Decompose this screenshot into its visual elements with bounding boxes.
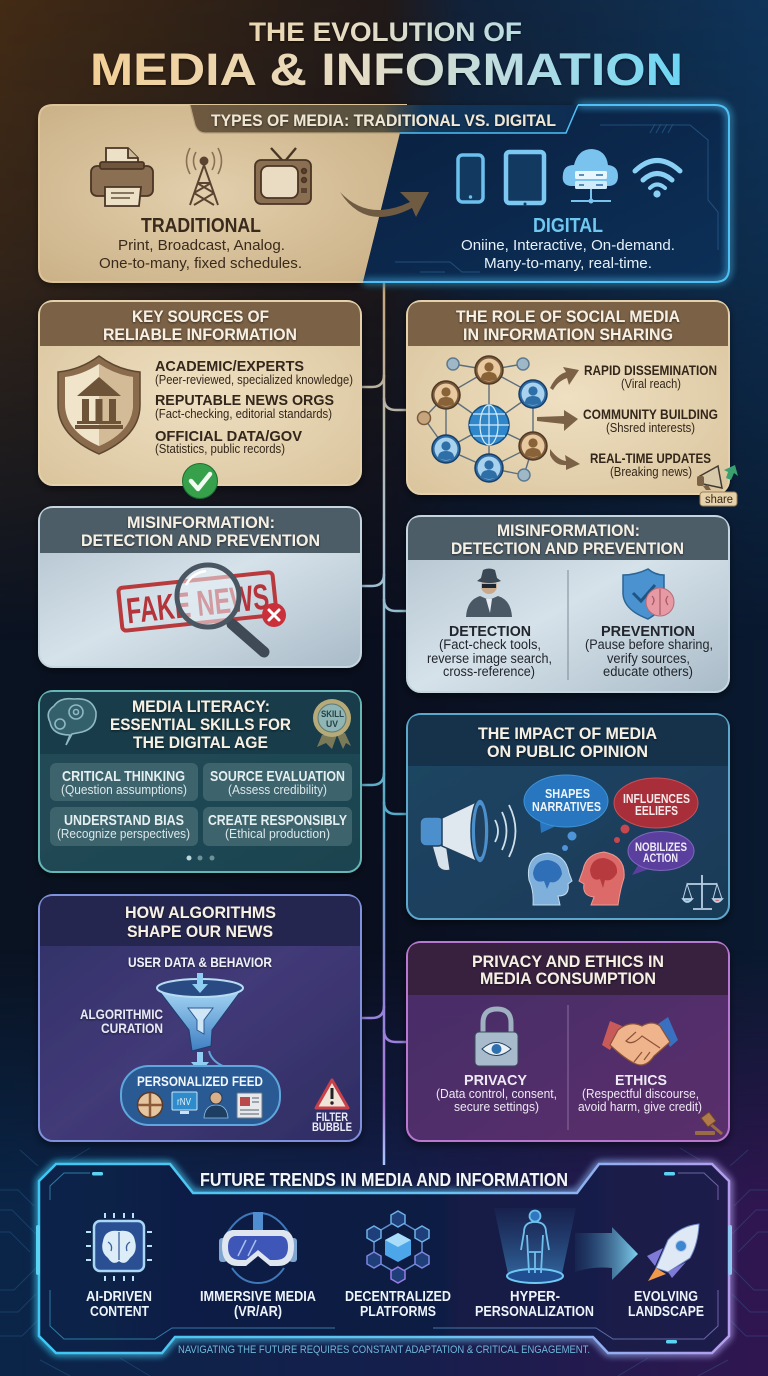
- prevention text: (Pause before sharing,: [585, 637, 713, 652]
- bubble: influences beliefs: [614, 778, 698, 843]
- digital text: [461, 215, 675, 272]
- header: THE IMPACT OF MEDIA: [478, 724, 657, 743]
- bubble: mobilizes action: [628, 832, 694, 875]
- header: ON PUBLIC OPINION: [487, 742, 648, 761]
- trend labels: EVOLVING: [634, 1289, 698, 1305]
- icon: share megaphone: share: [705, 494, 733, 506]
- skill card: create responsibly: [203, 807, 352, 846]
- ethics text: ETHICS: [615, 1072, 667, 1089]
- source list: (Fact-checking, editorial standards): [155, 407, 332, 421]
- icon: shield and brain: [623, 569, 674, 619]
- header: [408, 302, 728, 346]
- trend labels: PLATFORMS: [360, 1304, 436, 1320]
- icon: skill badge: SKILL: [321, 709, 344, 720]
- panel: impact on public opinion: [407, 714, 729, 919]
- curation label: ALGORITHMIC: [80, 1006, 163, 1022]
- detection text: DETECTION: [449, 623, 531, 640]
- trend labels: (VR/AR): [234, 1304, 282, 1320]
- header: MEDIA CONSUMPTION: [480, 969, 656, 988]
- icon: television: [255, 148, 311, 204]
- ethics text: [578, 1072, 702, 1114]
- detection text: (Fact-check tools,: [439, 637, 541, 652]
- icon: smartphone: [458, 155, 483, 202]
- panel: misinformation left: [39, 507, 361, 667]
- header: THE ROLE OF SOCIAL MEDIA: [456, 307, 680, 326]
- skill card: source evaluation: SOURCE EVALUATION: [210, 768, 345, 785]
- icon: VR headset: [219, 1212, 297, 1283]
- icon: cloud server: [563, 149, 618, 204]
- source list: REPUTABLE NEWS ORGS: [155, 392, 334, 409]
- prevention text: PREVENTION: [601, 623, 695, 640]
- icon: share megaphone: [697, 465, 738, 506]
- skill card: understand bias: (Recognize perspectives): [57, 826, 190, 841]
- panel: media literacy: [39, 691, 361, 872]
- arrows: [537, 367, 580, 470]
- social benefits text: COMMUNITY BUILDING: [583, 406, 718, 422]
- icon: filter bubble warning: [312, 1080, 352, 1134]
- icon: red x: [262, 603, 286, 627]
- skill card: create responsibly: (Ethical production): [225, 826, 330, 841]
- icon: tablet: [506, 152, 544, 206]
- prevention text: verify sources,: [607, 651, 690, 666]
- skill card: source evaluation: (Assess credibility): [228, 782, 327, 797]
- border traditional: [39, 105, 407, 282]
- source list: (Statistics, public records): [155, 442, 285, 456]
- digital text: Oniine, Interactive, On-demand.: [461, 238, 675, 254]
- trend labels: PERSONALIZATION: [475, 1304, 594, 1320]
- ethics text: avoid harm, give credit): [578, 1099, 702, 1114]
- fake news stamp: FAKE NEWS: [124, 576, 271, 631]
- header: RELIABLE INFORMATION: [103, 325, 297, 344]
- header: HOW ALGORITHMS: [125, 903, 276, 922]
- icon: printer: [91, 148, 153, 206]
- icon: wifi: [635, 160, 680, 197]
- icon: handshake: [602, 1017, 678, 1065]
- title: THE EVOLUTION OF: [249, 17, 522, 47]
- prevention text: [585, 623, 713, 679]
- icon: skill badge: [313, 699, 351, 749]
- source list: ACADEMIC/EXPERTS: [155, 358, 304, 375]
- header: ESSENTIAL SKILLS FOR: [110, 715, 291, 734]
- icon: filter bubble warning: FILTER: [316, 1110, 348, 1124]
- traditional paper side: [39, 105, 407, 282]
- trend labels: [86, 1289, 704, 1320]
- trend labels: LANDSCAPE: [628, 1304, 704, 1320]
- skill card: critical thinking: CRITICAL THINKING: [62, 768, 185, 785]
- header: [40, 896, 360, 946]
- curation label: [80, 1006, 163, 1036]
- title: MEDIA & INFORMATION: [90, 44, 683, 95]
- panel: social media: [407, 301, 738, 506]
- curation label: CURATION: [101, 1020, 163, 1036]
- heading: FUTURE TRENDS IN MEDIA AND INFORMATION: [200, 1170, 568, 1190]
- closing tagline: NAVIGATING THE FUTURE REQUIRES CONSTANT ADAPTATION & CRITICAL ENGAGEMENT.: [178, 1344, 590, 1356]
- ethics text: (Respectful discourse,: [582, 1086, 699, 1101]
- trend labels: AI-DRIVEN: [86, 1289, 152, 1305]
- icon: rocket: [647, 1224, 699, 1281]
- personalized feed: PERSONALIZED FEED: [137, 1073, 263, 1089]
- header: DETECTION AND PREVENTION: [451, 539, 684, 558]
- header tab: TYPES OF MEDIA: TRADITIONAL VS. DIGITAL: [211, 112, 556, 130]
- header tab: [190, 105, 578, 133]
- skill card: critical thinking: (Question assumptions): [61, 782, 187, 797]
- header: MISINFORMATION:: [497, 521, 640, 540]
- header: [40, 508, 360, 553]
- social benefits text: [583, 362, 718, 479]
- trend labels: CONTENT: [90, 1304, 149, 1320]
- traditional text: Print, Broadcast, Analog.: [118, 238, 285, 254]
- header: MEDIA LITERACY:: [132, 697, 270, 716]
- header: SHAPE OUR NEWS: [127, 922, 273, 941]
- personalized feed: rNV: [177, 1097, 191, 1108]
- social benefits text: (Viral reach): [621, 377, 681, 391]
- icon: gavel: [695, 1112, 722, 1135]
- header: IN INFORMATION SHARING: [463, 325, 673, 344]
- icon: broadcast tower: [186, 148, 222, 205]
- panel: privacy and ethics: [407, 942, 729, 1141]
- border digital: [363, 105, 729, 282]
- skill card: understand bias: [50, 807, 198, 846]
- detection text: cross-reference): [443, 664, 535, 679]
- digital text: DIGITAL: [533, 215, 603, 237]
- prevention text: educate others): [603, 664, 693, 679]
- panel: types of media: [39, 105, 729, 282]
- icon: decentralized blocks: [367, 1211, 429, 1283]
- icon: green check: [182, 464, 218, 498]
- header: PRIVACY AND ETHICS IN: [472, 952, 664, 971]
- skill card: understand bias: UNDERSTAND BIAS: [64, 812, 184, 829]
- icon: large megaphone: [420, 799, 516, 870]
- trend labels: DECENTRALIZED: [345, 1289, 451, 1305]
- icon: lock with eye: [475, 1009, 518, 1066]
- icon: skill badge: UV: [326, 719, 339, 730]
- connector timeline: [361, 283, 407, 1165]
- bubble: mobilizes action: NOBILIZES: [635, 842, 687, 854]
- social benefits text: (Breaking news): [610, 465, 692, 479]
- skill card: source evaluation: [203, 763, 352, 801]
- digital side: [363, 105, 729, 282]
- panel: misinformation right: [407, 516, 729, 692]
- icon: scales: [683, 875, 722, 909]
- social benefits text: (Shsred interests): [606, 421, 695, 435]
- network diagram: [418, 356, 547, 482]
- skill card: create responsibly: CREATE RESPONSIBLY: [208, 812, 347, 829]
- header: [408, 943, 728, 995]
- icon: AI chip: [86, 1213, 152, 1281]
- arrow: down to feed: [191, 1052, 209, 1073]
- bubble: shapes narratives: SHAPES: [545, 787, 590, 801]
- bubble: shapes narratives: [524, 775, 608, 851]
- bubble: mobilizes action: ACTION: [643, 853, 678, 865]
- trend labels: IMMERSIVE MEDIA: [200, 1289, 316, 1305]
- detection text: [427, 623, 552, 679]
- icon: shield with institution: [58, 356, 140, 454]
- source list: [155, 358, 353, 456]
- source list: OFFICIAL DATA/GOV: [155, 428, 302, 445]
- icon: detective: [466, 568, 512, 617]
- header: MISINFORMATION:: [127, 513, 275, 532]
- header: THE DIGITAL AGE: [133, 733, 268, 752]
- digital text: Many-to-many, real-time.: [484, 256, 652, 272]
- privacy text: secure settings): [454, 1099, 539, 1114]
- privacy text: PRIVACY: [464, 1072, 527, 1089]
- bubble: influences beliefs: EELIEFS: [635, 804, 678, 818]
- personalized feed: [121, 1051, 280, 1125]
- traditional text: One-to-many, fixed schedules.: [99, 256, 302, 272]
- icon: funnel: [157, 973, 243, 1051]
- icon: filter bubble warning: BUBBLE: [312, 1120, 352, 1134]
- icon: magnifying glass: [177, 565, 264, 652]
- icon: brain with gears: [48, 699, 96, 745]
- header: [408, 715, 728, 766]
- header: DETECTION AND PREVENTION: [81, 531, 320, 550]
- traditional text: TRADITIONAL: [141, 215, 261, 237]
- skill card: critical thinking: [50, 763, 198, 801]
- bubble: influences beliefs: INFLUENCES: [623, 792, 690, 806]
- arrow: future trend: [575, 1227, 638, 1280]
- traditional text: [99, 215, 302, 272]
- bubble: shapes narratives: NARRATIVES: [532, 800, 601, 814]
- arrow: traditional to digital: [340, 192, 429, 217]
- header: [408, 517, 728, 560]
- source list: (Peer-reviewed, specialized knowledge): [155, 373, 353, 387]
- icon: hologram figure: [494, 1208, 576, 1283]
- icon: red head: [579, 852, 624, 905]
- pagination dots: [186, 856, 214, 860]
- panel: key sources: [39, 301, 361, 498]
- detection text: reverse image search,: [427, 651, 552, 666]
- panel: algorithms: [39, 895, 361, 1141]
- fake news stamp: [118, 572, 277, 632]
- header: [40, 692, 360, 754]
- social benefits text: REAL-TIME UPDATES: [590, 450, 711, 466]
- header: [40, 302, 360, 346]
- privacy text: (Data control, consent,: [436, 1086, 557, 1101]
- title: [90, 17, 683, 95]
- privacy text: [436, 1072, 557, 1114]
- user data label: USER DATA & BEHAVIOR: [128, 954, 272, 970]
- header: KEY SOURCES OF: [132, 307, 269, 326]
- panel: future trends: [36, 1164, 732, 1356]
- trend labels: HYPER-: [510, 1289, 560, 1305]
- icon: blue head: [528, 853, 572, 905]
- social benefits text: RAPID DISSEMINATION: [584, 362, 717, 378]
